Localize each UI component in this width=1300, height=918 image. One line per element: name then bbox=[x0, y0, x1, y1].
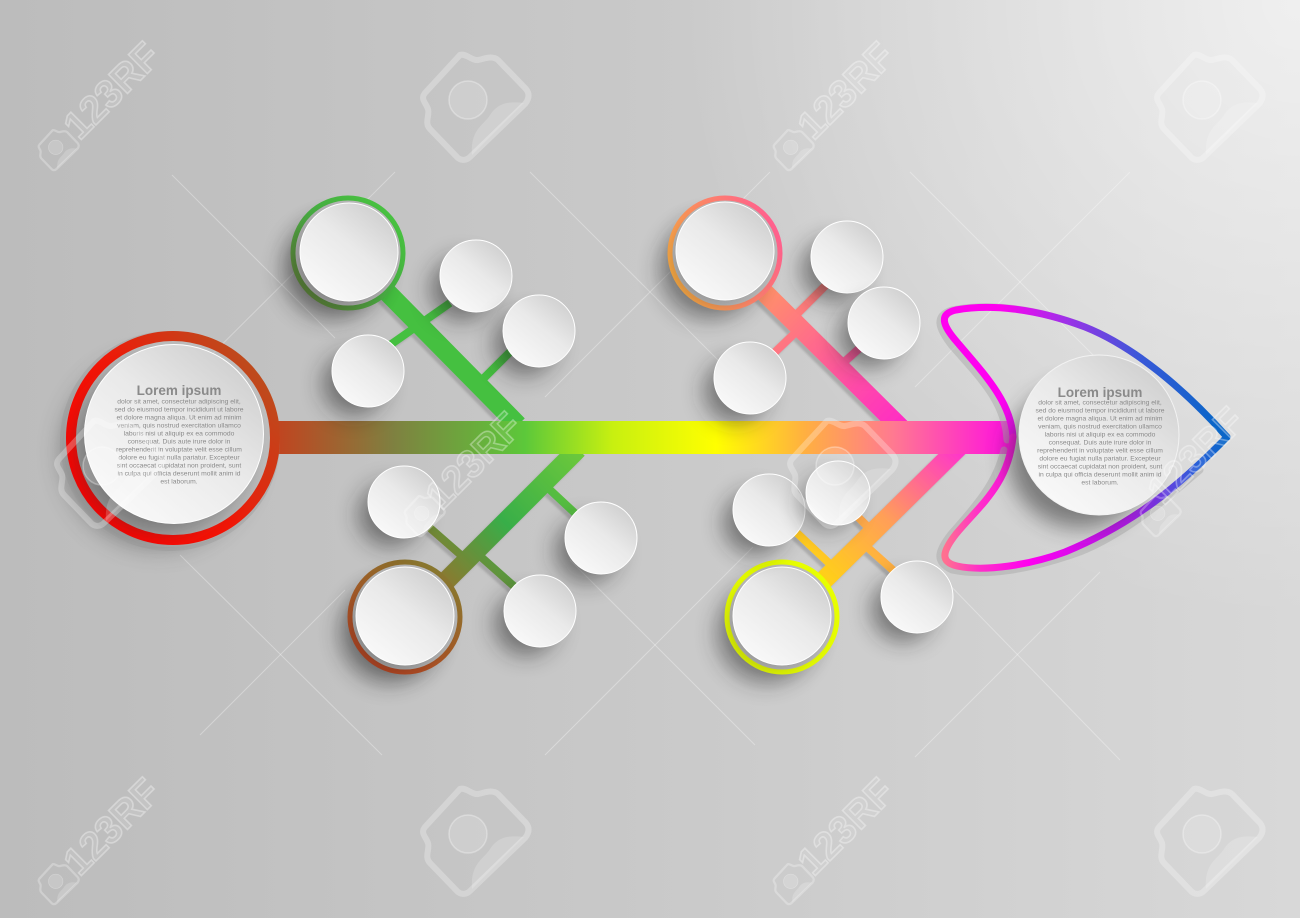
disc shadow bbox=[1008, 384, 1152, 528]
body text: est laborum. bbox=[1081, 480, 1119, 486]
body text: reprehenderit in voluptate velit esse cillum bbox=[1037, 448, 1163, 454]
diagonal light lines bbox=[100, 172, 1130, 760]
panel: fish head outline bbox=[940, 307, 1227, 573]
head top line bbox=[944, 307, 1227, 437]
orange ring node bbox=[659, 198, 780, 320]
watermark logo bottom 2 bbox=[1157, 789, 1263, 894]
body text: sed do eiusmod tempor incididunt ut labore bbox=[114, 406, 244, 414]
small nodes, upper-right bone bbox=[704, 221, 920, 423]
body text: consequat. Duis aute irure dolor in bbox=[128, 438, 231, 446]
spine bbox=[275, 421, 1012, 454]
fish bones with branches bbox=[386, 285, 962, 588]
small nodes, lower-right bone bbox=[723, 461, 953, 642]
watermark: 123RF bottom centre: 123RF bbox=[790, 771, 903, 884]
upper-right bone bbox=[760, 285, 905, 432]
body text: laboris nisi ut aliquip ex ea commodo bbox=[124, 430, 235, 438]
body text: dolore eu fugiat nulla pariatur. Excepteur bbox=[118, 454, 240, 462]
body text: dolore eu fugiat nulla pariatur. Excepteur bbox=[1039, 456, 1161, 462]
body text: in culpa qui officia deserunt mollit anim id bbox=[118, 470, 241, 478]
watermark: 123RF centre: 123RF bbox=[418, 405, 531, 518]
watermark logo centre bbox=[790, 421, 896, 526]
body text: dolor sit amet, consectetur adipiscing elit, bbox=[1038, 400, 1162, 406]
disc bbox=[1019, 355, 1179, 515]
head outline shadow bbox=[940, 307, 1200, 573]
body text: et dolore magna aliqua. Ut enim ad minim bbox=[1038, 416, 1163, 422]
brown ring node bbox=[339, 562, 460, 684]
body text: reprehenderit in voluptate velit esse cillum bbox=[116, 446, 242, 454]
green ring node bbox=[282, 198, 403, 320]
small nodes, green bone bbox=[322, 240, 575, 416]
body text: dolor sit amet, consectetur adipiscing elit, bbox=[117, 398, 241, 406]
watermark: 123RF right: 123RF bbox=[1140, 400, 1253, 513]
heading: Lorem ipsum bbox=[137, 383, 221, 398]
head bottom line bbox=[945, 437, 1227, 568]
body text: consequat. Duis aute irure dolor in bbox=[1049, 440, 1152, 446]
body text: sint occaecat cupidatat non proident, sunt bbox=[1038, 464, 1162, 470]
heading: Lorem ipsum bbox=[1058, 385, 1142, 400]
panel: head circle bbox=[1008, 355, 1179, 528]
body text: sed do eiusmod tempor incididunt ut labore bbox=[1035, 408, 1165, 414]
body text: veniam, quis nostrud exercitation ullamco bbox=[1038, 424, 1162, 430]
outer ring bbox=[71, 336, 275, 540]
body text: veniam, quis nostrud exercitation ullamco bbox=[117, 422, 241, 430]
panel: left big circle bbox=[58, 333, 278, 552]
body text: sint occaecat cupidatat non proident, sunt bbox=[117, 462, 241, 470]
disc bbox=[84, 344, 264, 524]
watermark: 123RF top left: 123RF bbox=[56, 35, 169, 148]
outer soft shadow bbox=[58, 352, 258, 552]
upper-left bone bbox=[386, 291, 518, 425]
body text: est laborum. bbox=[160, 478, 198, 486]
watermark logo top 2 bbox=[1157, 55, 1263, 160]
body text: et dolore magna aliqua. Ut enim ad minim bbox=[117, 414, 242, 422]
lower-left bone bbox=[430, 449, 578, 588]
watermark logo bottom 1 bbox=[423, 789, 529, 894]
disc shadow bbox=[76, 368, 240, 532]
small nodes, lower-left bone bbox=[358, 466, 637, 656]
body text: laboris nisi ut aliquip ex ea commodo bbox=[1045, 432, 1156, 438]
watermark logo left bbox=[57, 421, 163, 526]
watermark logo top 1 bbox=[423, 55, 529, 160]
body text: in culpa qui officia deserunt mollit anim id bbox=[1039, 472, 1162, 478]
watermark: 123RF top centre: 123RF bbox=[790, 35, 903, 148]
ring shadow bbox=[62, 333, 278, 549]
watermark: 123RF bottom left: 123RF bbox=[56, 771, 169, 884]
yellow ring node bbox=[716, 562, 837, 684]
lower-right bone bbox=[797, 444, 962, 582]
